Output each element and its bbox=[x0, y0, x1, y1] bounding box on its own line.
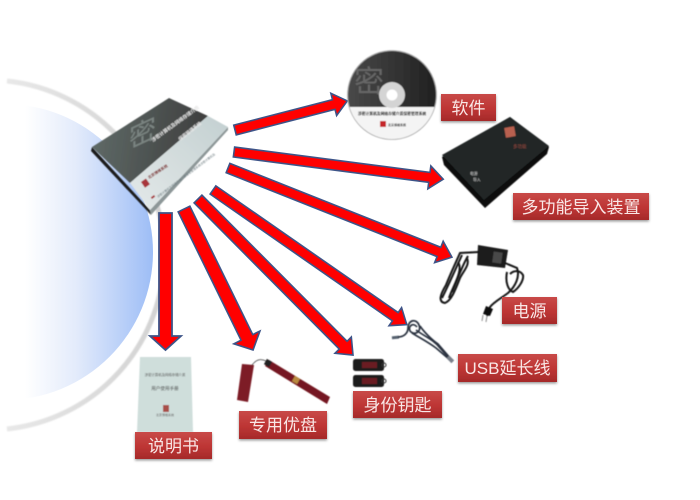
CD logo bbox=[380, 121, 386, 127]
label: multi-function import device: 多功能导入装置 bbox=[522, 198, 640, 217]
device indicators: 电源 bbox=[470, 171, 478, 176]
box small print: 涉密计算机及网络存储介质保密管理系统涉密计算机及 bbox=[156, 151, 216, 199]
label: dedicated USB disk bbox=[239, 411, 327, 439]
device name: 多功能 bbox=[513, 143, 527, 150]
software CD bbox=[345, 50, 440, 140]
label: multi-function import device bbox=[513, 193, 649, 220]
manual publisher: 北京博维系统 bbox=[156, 412, 174, 417]
manual seal bbox=[163, 405, 169, 412]
label: manual bbox=[135, 432, 212, 459]
label: software bbox=[441, 94, 496, 121]
label: power: 电源 bbox=[512, 302, 546, 321]
box title: 涉密计算机及网络存储介质 bbox=[150, 104, 201, 144]
label: software: 软件 bbox=[452, 99, 486, 118]
device stamp bbox=[504, 126, 516, 138]
CD seal glyph: 密 bbox=[354, 66, 384, 99]
label: USB extension cable bbox=[458, 354, 557, 382]
box company name: 北京博维系统 bbox=[147, 163, 169, 180]
arrow: to power adapter bbox=[224, 157, 456, 268]
decorative blue circle bbox=[0, 104, 153, 400]
decorative grey ring bbox=[7, 81, 164, 429]
key 1 bbox=[353, 359, 386, 371]
USB extension cable bbox=[392, 321, 454, 363]
manual name: 用户使用手册 bbox=[151, 385, 179, 392]
arrow: to software bbox=[232, 90, 350, 141]
label: dedicated USB disk: 专用优盘 bbox=[249, 416, 317, 435]
manual title: 涉密计算机及网络存储介质 bbox=[145, 372, 186, 377]
arrow: to multi-function device bbox=[233, 141, 445, 191]
label: identity key: 身份钥匙 bbox=[364, 396, 432, 415]
arrow: to manual bbox=[150, 213, 181, 350]
label: USB extension cable: USB延长线 bbox=[465, 359, 550, 378]
key 2 bbox=[353, 375, 386, 387]
arrow: to identity keys bbox=[190, 191, 361, 363]
identity keys bbox=[353, 359, 386, 387]
disk strap bbox=[265, 360, 330, 404]
CD title: 涉密计算机及网络存储介质保密管理系统 bbox=[358, 111, 426, 116]
CD hub bbox=[379, 82, 405, 108]
adapter cords bbox=[441, 252, 523, 316]
arrow: to USB cable bbox=[207, 181, 413, 334]
arrow: to USB disk bbox=[171, 203, 266, 356]
label: identity key bbox=[353, 391, 442, 418]
label: manual: 说明书 bbox=[148, 437, 199, 456]
seal glyph on box: 密 bbox=[129, 113, 156, 156]
product box bbox=[91, 98, 228, 215]
device indicators row 2: 导入 bbox=[473, 177, 481, 182]
multi-function import device bbox=[442, 117, 549, 208]
user manual bbox=[137, 357, 193, 432]
dedicated USB disk bbox=[237, 359, 330, 404]
disk tag bbox=[237, 364, 254, 402]
CD company name: 北京博维系统 bbox=[388, 122, 406, 127]
adapter plug bbox=[483, 306, 493, 316]
box subtitle: 保密管理系统 bbox=[177, 120, 203, 143]
box logo bbox=[141, 179, 150, 188]
label: power bbox=[502, 297, 557, 324]
power adapter bbox=[441, 245, 523, 322]
